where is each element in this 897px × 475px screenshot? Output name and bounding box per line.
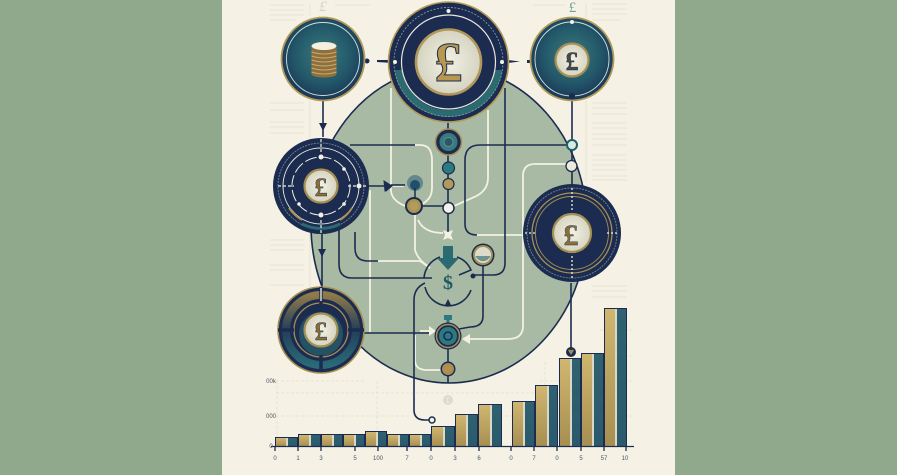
faint background annotation text lines	[270, 3, 627, 297]
top large pound coin	[388, 2, 508, 122]
teal node	[442, 162, 454, 174]
y axis labels: 000	[266, 414, 277, 420]
pearl node	[472, 244, 494, 266]
x axis labels: 57	[601, 456, 608, 462]
right teal node	[567, 140, 577, 150]
navy connector lines	[322, 88, 572, 420]
gold left node	[405, 197, 423, 215]
teal T marker	[444, 315, 452, 324]
coin stack icon	[312, 42, 336, 78]
lower left pound circle	[278, 287, 364, 373]
left middle pound circle: £	[314, 173, 328, 202]
ring node	[436, 129, 462, 155]
central cream panel	[222, 0, 675, 475]
cream connector lines	[370, 88, 566, 370]
arrow stub: stack coin right	[364, 58, 370, 64]
arrow: into big coin from right	[508, 60, 520, 63]
dot on central circle junction	[470, 274, 476, 278]
spine nodes	[405, 129, 577, 423]
x axis labels	[273, 456, 629, 462]
top right pound circle	[530, 18, 614, 100]
chart dot	[429, 417, 435, 423]
hub dollar sign: $	[443, 272, 453, 294]
right pound circle: £	[564, 219, 578, 252]
x axis labels: 100	[373, 456, 384, 462]
x axis labels: 10	[622, 456, 629, 462]
cream arrowhead from right into lower node	[462, 334, 470, 344]
bar chart	[266, 308, 634, 462]
arrow: right from left coin	[384, 181, 392, 191]
arrow: into big coin from left	[377, 60, 392, 63]
arrow: down to lower left coin	[318, 249, 326, 257]
x axis labels: 0	[273, 456, 277, 462]
x axis labels: 3	[319, 456, 323, 462]
gold node	[443, 178, 454, 190]
large sage circle	[311, 67, 587, 383]
central dollar hub	[424, 246, 471, 306]
lower left pound circle: £	[314, 317, 328, 346]
bars	[275, 308, 627, 446]
splash	[407, 175, 423, 198]
right white node	[566, 160, 577, 172]
x axis labels: 0	[509, 456, 513, 462]
cream arrowhead into lower node	[429, 326, 436, 336]
y axis labels	[266, 379, 277, 450]
arrow stub: top right coin	[527, 60, 532, 63]
left middle pound circle	[273, 138, 369, 234]
x axis labels: 0	[429, 456, 433, 462]
top left coin stack circle	[282, 18, 364, 100]
arrowheads	[318, 58, 532, 278]
y axis labels: 00k	[266, 379, 277, 385]
x axis	[271, 446, 634, 451]
lower ring node	[434, 322, 462, 350]
right pound circle	[523, 184, 621, 282]
hub small up arrow	[445, 299, 451, 305]
white node	[443, 202, 454, 214]
gold heart marker	[566, 347, 576, 357]
star node	[443, 230, 453, 240]
connector lines	[322, 88, 572, 420]
x axis labels: 0	[555, 456, 559, 462]
chart gridlines	[276, 330, 632, 446]
lower gold node	[440, 362, 456, 376]
top large pound coin: £	[434, 32, 462, 94]
faded pound marker	[443, 395, 453, 405]
hub ring	[424, 257, 471, 306]
x axis labels: 3	[453, 456, 457, 462]
x axis labels: 7	[532, 456, 536, 462]
faded pound marker: £	[446, 396, 450, 405]
top right pound circle: £	[566, 47, 578, 76]
x axis labels: 1	[296, 456, 300, 462]
green pound symbol top right: £	[569, 0, 577, 16]
x axis labels: 6	[477, 456, 481, 462]
x axis labels: 7	[405, 456, 409, 462]
hub teal down arrow	[437, 246, 459, 270]
x axis labels: 5	[579, 456, 583, 462]
arrow: down from stack coin	[319, 123, 327, 131]
x axis labels: 5	[353, 456, 357, 462]
y axis labels: 0	[269, 444, 273, 450]
